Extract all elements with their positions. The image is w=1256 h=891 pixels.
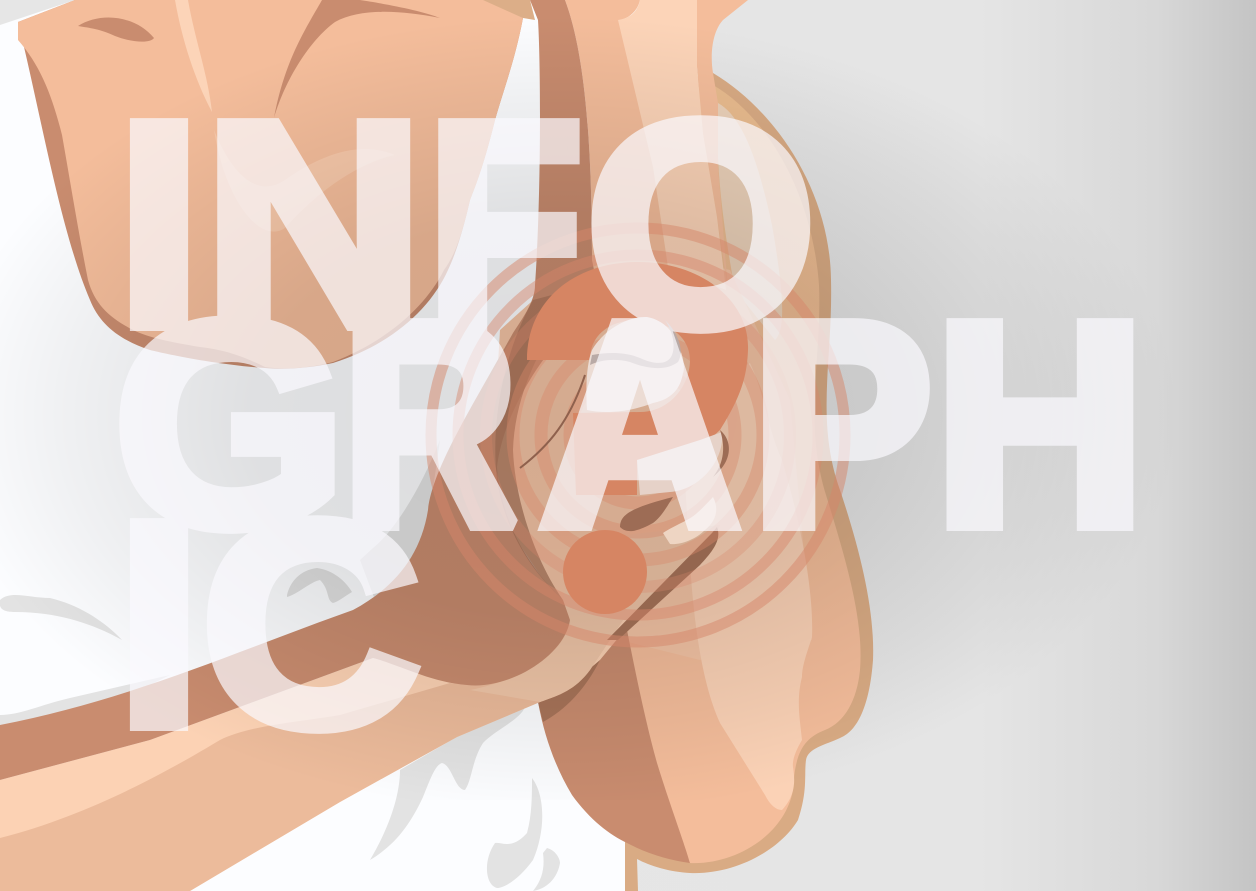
head centre skin <box>490 240 812 660</box>
concentric rings <box>431 228 845 642</box>
pale lower swirl <box>637 432 722 495</box>
pale inner blob <box>586 317 684 412</box>
chest mark left <box>78 18 154 42</box>
tan collar edge <box>483 0 535 20</box>
word: INFO: I <box>117 63 201 386</box>
upper ear skin band <box>697 0 748 290</box>
word: INFO: O <box>586 63 816 386</box>
shirt hem shadow <box>0 675 170 740</box>
lower shirt fold two <box>487 778 542 888</box>
diagonal dark strip <box>607 527 718 640</box>
inner ear details <box>520 317 729 544</box>
word: IC: I <box>117 463 201 786</box>
word: GRAPH: H <box>934 263 1146 586</box>
brown forearm and neck mass <box>0 0 600 780</box>
chest crease centre <box>274 0 440 118</box>
arm mid tone <box>0 620 623 891</box>
gray crease in blob <box>590 320 681 368</box>
tan outer contour of the ear <box>600 73 873 891</box>
dark inner crescent <box>495 285 590 600</box>
light lower fold of the ear <box>680 363 812 810</box>
word: INFO: N <box>204 63 423 386</box>
word: GRAPH: P <box>752 263 932 586</box>
pale lower curl <box>663 497 716 544</box>
shirt fold by the hand <box>287 568 352 603</box>
chest shadow <box>18 0 523 369</box>
word: GRAPH: A <box>540 263 740 586</box>
word: GRAPH: G <box>114 263 346 586</box>
lower pouch shadow <box>538 630 690 863</box>
title lettering <box>114 63 1146 786</box>
lower shirt fold three <box>533 848 560 891</box>
shirt gray underside <box>360 440 440 600</box>
dark right crescent <box>713 430 729 477</box>
white shirt <box>0 0 640 891</box>
chest highlight <box>214 130 395 232</box>
ear skin fill <box>600 85 861 863</box>
chest light streak <box>175 0 212 112</box>
peach arm upper tone <box>0 525 720 891</box>
word: IC: C <box>202 463 420 786</box>
lower shirt fold one <box>370 707 525 860</box>
arm skin toward the head <box>470 525 720 702</box>
word: GRAPH: R <box>342 263 518 586</box>
dark lower blot <box>620 497 673 531</box>
pale upper lobe <box>717 103 782 340</box>
chest skin <box>18 0 523 368</box>
word: INFO: F <box>427 63 583 386</box>
pouch dark strip <box>538 620 633 722</box>
shirt fold left <box>0 595 122 640</box>
light ear rim <box>618 0 726 290</box>
skin band beside the column <box>565 0 680 310</box>
orange question mark <box>527 262 748 614</box>
hairline crack <box>520 375 585 468</box>
